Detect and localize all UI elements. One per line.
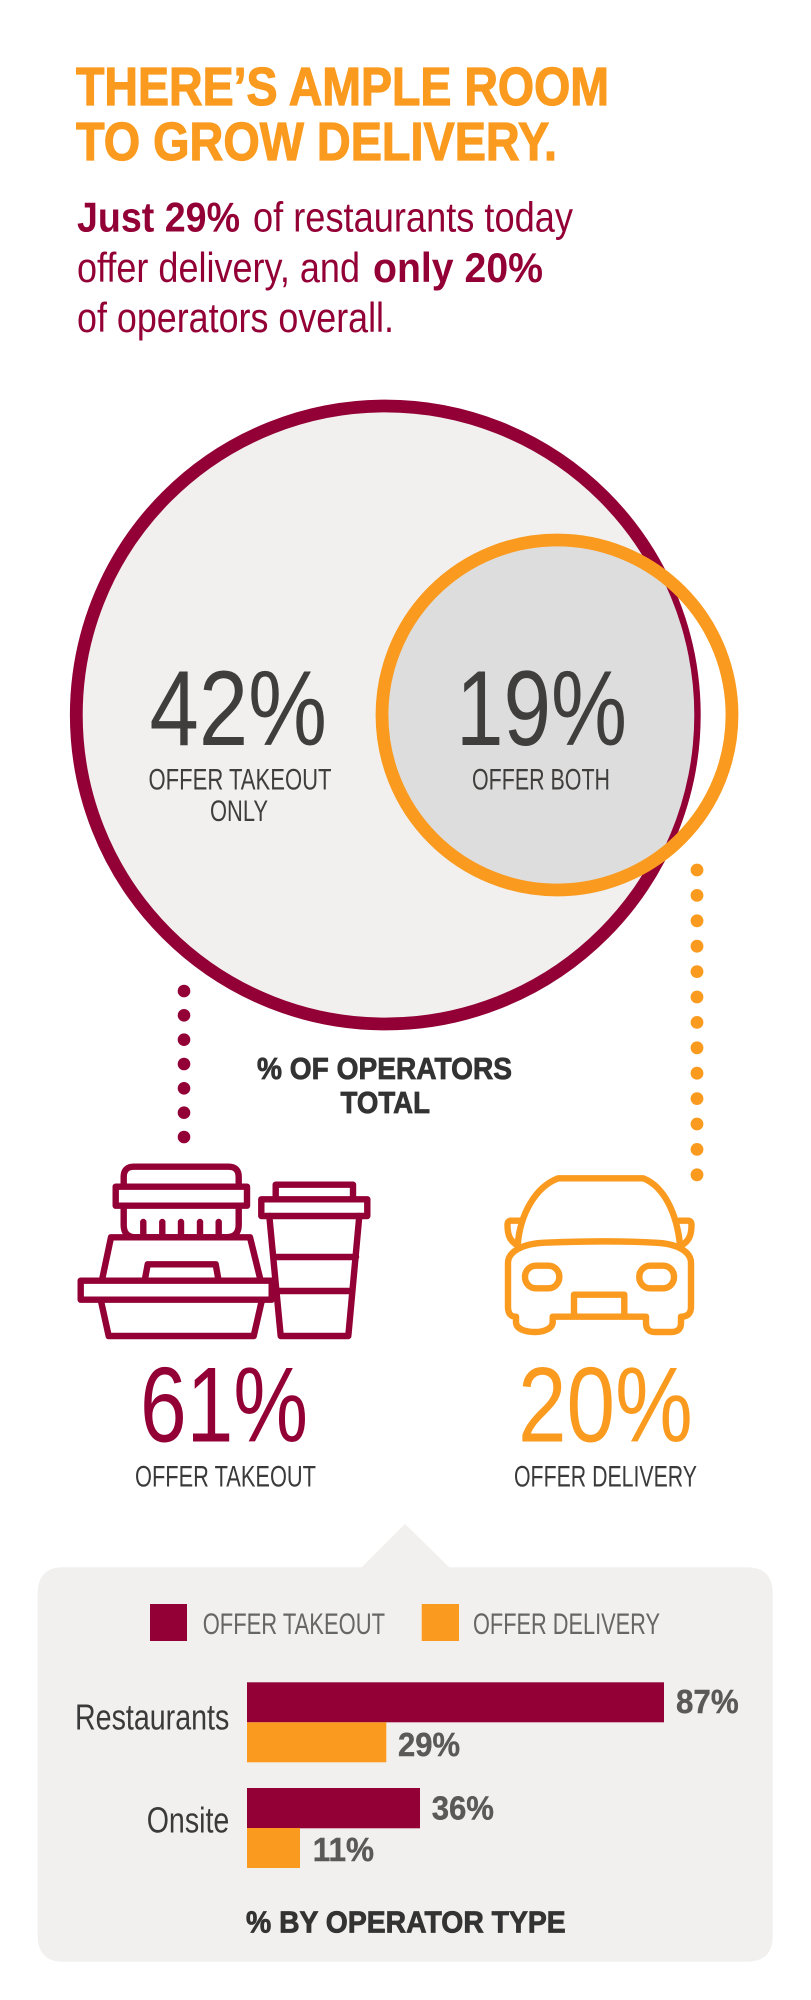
- title: TO GROW DELIVERY.: [76, 113, 557, 172]
- bar chart: 36%: [432, 1789, 494, 1826]
- stat: 20% offer delivery: [514, 1345, 697, 1494]
- intro text block: [77, 194, 573, 341]
- bar chart: 29%: [398, 1726, 460, 1763]
- intro text block: only 20%: [373, 244, 543, 291]
- overlap area: [388, 546, 694, 884]
- stat: 19% both: 19%: [456, 648, 627, 768]
- stat: 42% takeout only: 42%: [150, 648, 327, 768]
- bar chart: 87%: [676, 1683, 739, 1720]
- legend: OFFER TAKEOUT: [203, 1608, 385, 1641]
- intro text block: Just 29%: [77, 194, 240, 241]
- delivery circle: [382, 540, 732, 890]
- bar chart: 11%: [313, 1831, 374, 1868]
- stat: 19% both: [456, 648, 627, 796]
- stat: 19% both: OFFER BOTH: [472, 764, 610, 796]
- intro text block: of operators overall.: [77, 294, 394, 341]
- intro text block: of restaurants today: [253, 194, 573, 241]
- panel: by operator type: [38, 1524, 773, 1962]
- panel background with pointer: [38, 1524, 773, 1962]
- stat: 42% takeout only: [148, 648, 332, 828]
- stat: 42% takeout only: ONLY: [210, 795, 268, 828]
- caption: % of operators total: TOTAL: [340, 1085, 430, 1120]
- stat: 61% offer takeout: 61%: [140, 1345, 308, 1465]
- caption: % of operators total: % OF OPERATORS: [257, 1051, 512, 1086]
- stat: 42% takeout only: OFFER TAKEOUT: [148, 764, 332, 796]
- caption: % by operator type: % BY OPERATOR TYPE: [246, 1905, 566, 1940]
- stat: 61% offer takeout: [135, 1345, 316, 1494]
- icon: delivery car: [508, 1178, 692, 1332]
- takeout circle: [76, 406, 694, 1024]
- bar chart: [75, 1682, 739, 1868]
- icon: takeout containers and cup: [81, 1167, 367, 1336]
- dotted connector: delivery: [691, 864, 703, 1181]
- stat: 61% offer takeout: OFFER TAKEOUT: [135, 1461, 316, 1494]
- venn diagram: [76, 406, 732, 1024]
- legend: [150, 1604, 660, 1641]
- stat: 20% offer delivery: OFFER DELIVERY: [514, 1461, 697, 1494]
- bar chart: Restaurants: [75, 1696, 229, 1737]
- title: THERE’S AMPLE ROOM: [76, 58, 609, 117]
- caption: % of operators total: [257, 1051, 512, 1120]
- bar chart: Onsite: [147, 1800, 229, 1841]
- title: [76, 58, 609, 172]
- stat: 20% offer delivery: 20%: [518, 1345, 693, 1465]
- legend: OFFER DELIVERY: [473, 1608, 660, 1641]
- dotted connector: takeout: [178, 985, 190, 1143]
- intro text block: offer delivery, and: [77, 244, 360, 291]
